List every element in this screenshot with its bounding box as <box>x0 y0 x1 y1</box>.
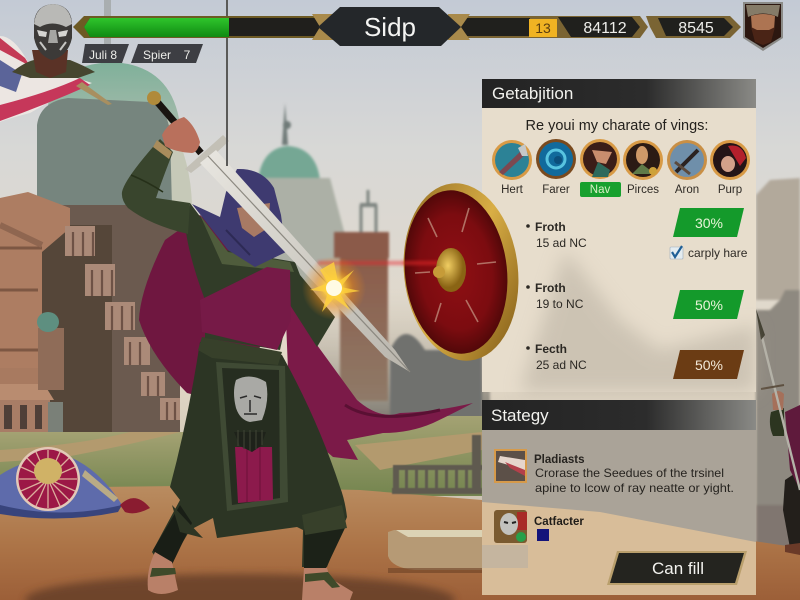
icon: hert <box>492 140 532 180</box>
row 1 <box>526 220 587 250</box>
icon: nav <box>580 139 620 179</box>
row 2 badge: 50% <box>695 297 723 313</box>
heading <box>482 79 756 108</box>
stat tag: Spier <box>143 48 171 62</box>
row 2 <box>526 281 584 311</box>
row 2 badge <box>673 290 744 319</box>
ground shadow under figure <box>25 574 455 600</box>
feet <box>148 552 353 600</box>
wooden box on ground <box>388 530 482 573</box>
icon: farer <box>536 139 576 179</box>
icon: pirces <box>623 140 663 180</box>
level badge: 13 <box>535 20 551 36</box>
row 2: Froth <box>535 281 566 295</box>
right hero portrait <box>743 2 783 51</box>
icon: purp <box>710 140 750 180</box>
color swatch <box>537 529 549 541</box>
face medallion <box>234 376 267 452</box>
stat tag: 7 <box>184 48 191 62</box>
icon labels: Farer <box>542 184 570 196</box>
top status bar <box>73 7 741 63</box>
stat tag <box>131 44 203 63</box>
strategy text: Crorase the Seedues of the trsinel <box>535 466 724 480</box>
hand <box>162 117 200 153</box>
icon labels <box>501 182 742 197</box>
grass and path <box>0 416 490 496</box>
title badge <box>312 7 470 46</box>
row 3: 25 ad NC <box>536 358 587 372</box>
row 3 badge: 50% <box>695 357 723 373</box>
row 1 badge: 30% <box>695 215 723 231</box>
sword glow <box>302 256 440 320</box>
hood and scarf <box>192 169 286 267</box>
row 3 badge <box>673 350 744 379</box>
strategy text: Pladiasts <box>534 454 584 466</box>
panel: strategy <box>482 400 756 595</box>
row 3 <box>526 342 587 372</box>
heading <box>482 400 756 430</box>
building: terraced left block <box>0 192 180 435</box>
legs and skirt <box>152 342 347 575</box>
checkbox: carply hare <box>688 246 748 260</box>
building: large domed palace <box>37 0 192 433</box>
stat tag: Juli 8 <box>89 48 117 62</box>
instruction text: Re youi my charate of vings: <box>526 118 708 134</box>
heading: Getabjition <box>492 84 573 103</box>
row 2: 19 to NC <box>536 297 584 311</box>
balustrade <box>392 435 484 494</box>
flag <box>0 36 112 122</box>
belt <box>198 337 282 365</box>
second counter: 8545 <box>678 20 714 37</box>
raised arm <box>122 139 190 234</box>
icon labels: Purp <box>718 184 742 196</box>
icon labels: Pirces <box>627 184 659 196</box>
heading: Stategy <box>491 406 549 425</box>
title badge: Sidp <box>364 12 416 42</box>
right bar <box>455 16 648 38</box>
ground <box>0 486 800 600</box>
cape <box>139 215 473 460</box>
row 1 badge <box>673 208 744 237</box>
shield <box>395 178 527 366</box>
torso and right arm <box>186 203 335 350</box>
panel: getabjition <box>482 79 756 392</box>
stat tag <box>82 44 129 63</box>
strategy text: apine to lcow of ray neatte or yight. <box>535 481 734 495</box>
second counter <box>646 16 741 38</box>
row 3: Fecth <box>535 342 567 356</box>
row 1: Froth <box>535 220 566 234</box>
strategy icon: character <box>494 510 527 543</box>
icon labels: Hert <box>501 184 524 196</box>
apron with burgundy panel <box>216 362 288 511</box>
row 1: 15 ad NC <box>536 236 587 250</box>
hero figure <box>122 139 473 600</box>
icon: aron <box>667 140 707 180</box>
icon labels: Aron <box>675 184 699 196</box>
building: round tower with lantern <box>334 190 389 401</box>
button: Can fill <box>652 559 704 578</box>
distant buildings <box>390 178 800 548</box>
building: central dome <box>258 103 345 300</box>
vertical pole <box>226 0 228 166</box>
health bar <box>73 16 330 38</box>
button <box>607 551 747 585</box>
left character portrait <box>12 4 95 78</box>
distant haze <box>300 290 490 425</box>
burgundy sash <box>200 267 291 350</box>
soldier with spear at right edge <box>756 309 800 555</box>
gold counter: 84112 <box>583 20 627 37</box>
strategy character label: Catfacter <box>534 516 584 528</box>
cushion with round shield <box>0 447 150 519</box>
level badge <box>529 19 557 37</box>
sword <box>147 91 410 372</box>
strategy icon: gladiator <box>494 449 527 483</box>
icon labels: Nav <box>590 184 610 196</box>
strategy text <box>534 454 734 495</box>
